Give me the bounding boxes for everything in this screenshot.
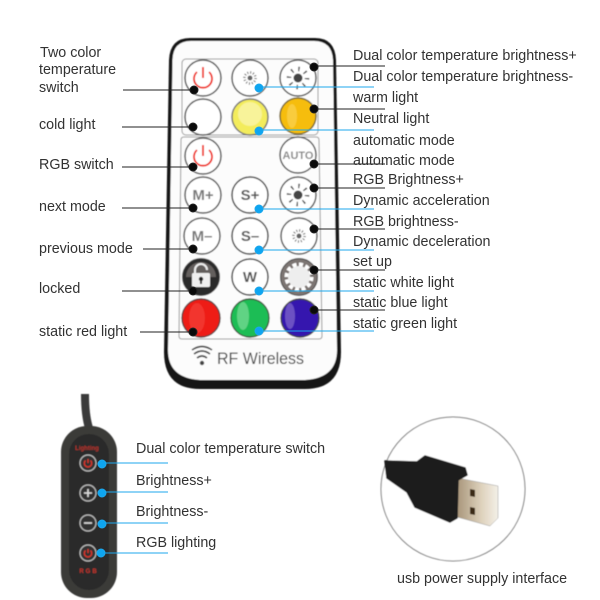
button: S plus <box>232 177 268 213</box>
right labels: Dynamic deceleration <box>353 234 491 250</box>
button: warm light <box>280 98 316 134</box>
inline controller <box>61 394 117 598</box>
controller button: minus <box>80 515 96 531</box>
controller labels: Brightness+ <box>136 473 212 489</box>
left labels: locked <box>39 281 80 297</box>
right labels: static white light <box>353 275 454 291</box>
button: M minus: M– <box>192 228 212 245</box>
circle outline <box>381 417 525 561</box>
controller button: power <box>80 455 96 471</box>
left labels <box>39 45 133 340</box>
right labels: Dual color temperature brightness+ <box>353 48 577 64</box>
button: brightness minus <box>232 60 268 96</box>
controller button: RGB power <box>80 545 96 561</box>
button: RGB switch <box>185 138 221 174</box>
button: white light: W <box>243 269 258 286</box>
button: S minus <box>232 218 268 254</box>
button: RGB brightness minus <box>281 218 317 254</box>
button: two color power <box>185 60 221 96</box>
right black callout lines <box>310 63 385 314</box>
button: auto <box>280 137 316 173</box>
RF Wireless logo <box>192 346 304 368</box>
button: S plus: S+ <box>241 187 260 204</box>
USB metal connector <box>457 478 498 526</box>
button: brightness plus <box>280 60 316 96</box>
right labels <box>352 48 577 332</box>
right labels: Dynamic acceleration <box>353 193 490 209</box>
left labels: Two color <box>40 45 101 61</box>
left labels: next mode <box>39 199 106 215</box>
right labels: warm light <box>352 90 418 106</box>
button: M plus <box>185 177 221 213</box>
controller labels <box>136 441 325 551</box>
button: blue light <box>281 299 319 337</box>
remote body <box>164 38 341 389</box>
button: set up <box>280 258 318 296</box>
RGB label: RGB <box>79 569 99 575</box>
right labels: set up <box>353 254 392 270</box>
right labels: automatic mode <box>353 133 455 149</box>
USB plug in circle <box>381 417 525 561</box>
left labels: temperature <box>39 62 116 78</box>
controller labels: RGB lighting <box>136 535 216 551</box>
controller callouts <box>97 460 168 557</box>
button: red light <box>182 299 220 337</box>
controller button: plus <box>80 485 96 501</box>
button: S minus: S– <box>241 228 259 245</box>
button: white light <box>232 259 268 295</box>
right blue callout lines <box>255 84 374 335</box>
USB plastic housing <box>385 456 467 522</box>
lower button panel <box>179 137 322 339</box>
left labels: RGB switch <box>39 157 114 173</box>
right labels: Neutral light <box>353 111 429 127</box>
right labels: RGB Brightness+ <box>353 172 464 188</box>
left labels: static red light <box>39 324 127 340</box>
button: green light <box>231 299 269 337</box>
controller cable <box>85 394 89 428</box>
right labels: Dual color temperature brightness- <box>353 69 573 85</box>
right labels: automatic mode <box>353 153 455 169</box>
controller body <box>61 426 117 598</box>
right labels: static green light <box>353 316 457 332</box>
button: auto: AUTO <box>283 150 314 162</box>
button: neutral light <box>232 99 268 135</box>
controller labels: Dual color temperature switch <box>136 441 325 457</box>
button: cold light <box>185 99 221 135</box>
remote control <box>164 38 341 389</box>
controller labels: Brightness- <box>136 504 209 520</box>
right labels: RGB brightness- <box>353 214 459 230</box>
button: M minus <box>184 218 220 254</box>
right labels: static blue light <box>353 295 448 311</box>
left labels: previous mode <box>39 241 133 257</box>
USB label: usb power supply interface <box>397 571 567 587</box>
button: RGB brightness plus <box>280 177 316 213</box>
Lighting label: Lighting <box>75 446 99 452</box>
top button panel <box>182 59 318 135</box>
left labels: switch <box>39 80 79 96</box>
left callout lines <box>122 86 198 336</box>
USB holes <box>470 489 475 515</box>
button: M plus: M+ <box>192 187 214 204</box>
button: locked <box>182 258 220 296</box>
RF Wireless logo: RF Wireless <box>217 349 304 368</box>
left labels: cold light <box>39 117 95 133</box>
